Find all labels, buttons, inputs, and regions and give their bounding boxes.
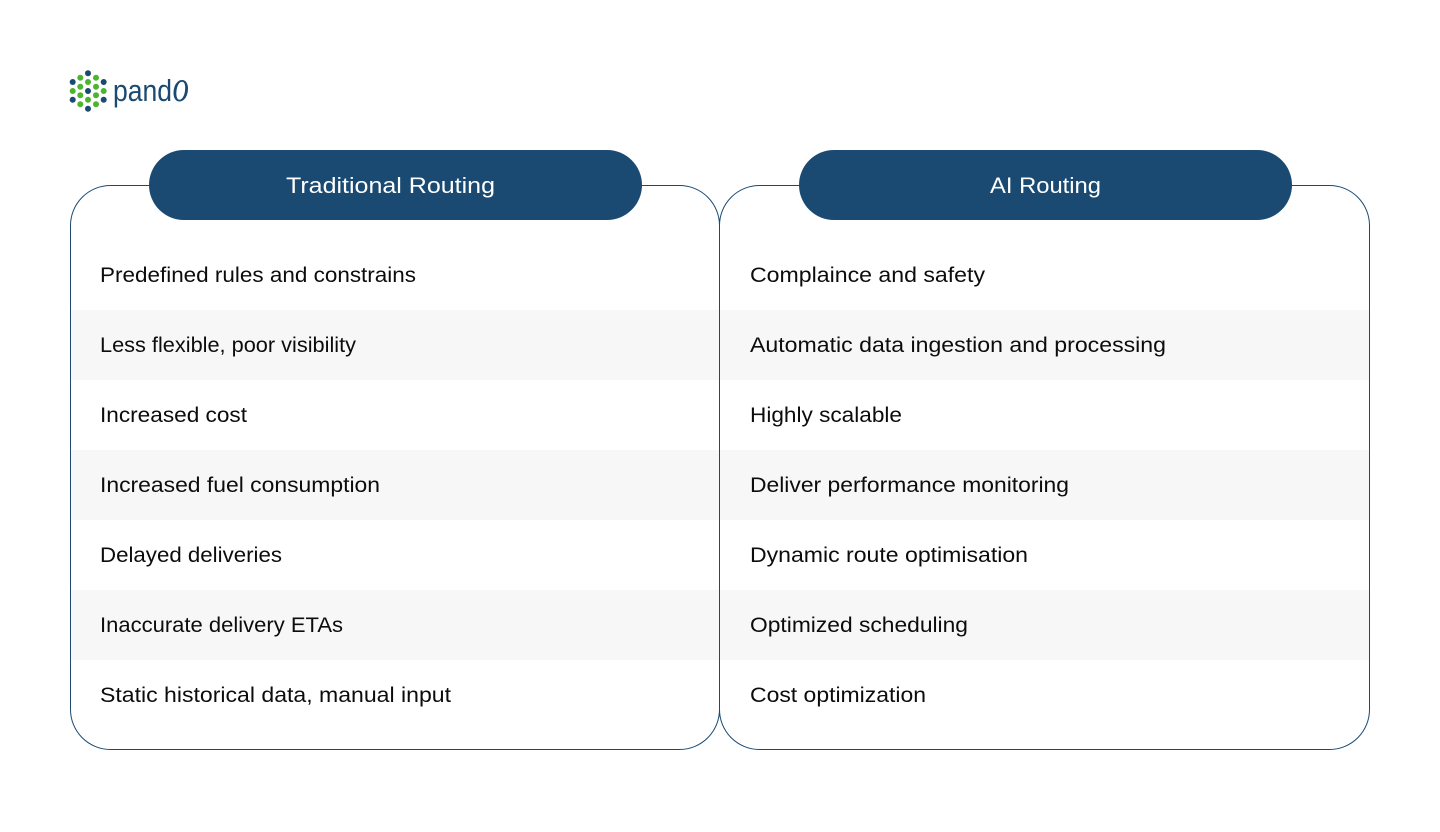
heading pill: traditional routing bbox=[149, 150, 642, 220]
logo wordmark: pand bbox=[113, 73, 172, 108]
list: ai routing items: Highly scalable bbox=[750, 404, 902, 427]
list: traditional routing items: Inaccurate delivery ETAs bbox=[100, 614, 343, 637]
list: ai routing items: Automatic data ingestion and processing bbox=[750, 334, 1166, 357]
row backgrounds bbox=[720, 310, 1369, 660]
icon: dot hexagon bbox=[70, 70, 107, 112]
panel outline bbox=[70, 186, 720, 750]
list: traditional routing items: Static historical data, manual input bbox=[100, 684, 451, 707]
list: ai routing items: Dynamic route optimisation bbox=[750, 544, 1028, 567]
list: ai routing items: Optimized scheduling bbox=[750, 614, 968, 637]
logo wordmark: o bbox=[172, 62, 189, 111]
list: traditional routing items: Increased cost bbox=[100, 404, 247, 427]
heading pill: ai routing: AI Routing bbox=[990, 173, 1101, 198]
list: traditional routing items bbox=[100, 264, 451, 707]
row backgrounds bbox=[71, 310, 719, 660]
list: traditional routing items: Less flexible, poor visibility bbox=[100, 334, 357, 357]
panel: traditional routing bbox=[70, 150, 720, 750]
list: traditional routing items: Predefined rules and constrains bbox=[100, 264, 416, 287]
list: traditional routing items: Increased fuel consumption bbox=[100, 474, 380, 497]
list: ai routing items: Cost optimization bbox=[750, 684, 926, 707]
list: ai routing items: Complaince and safety bbox=[750, 264, 986, 287]
logo: pando bbox=[70, 62, 189, 112]
panel outline bbox=[720, 186, 1370, 750]
list: ai routing items: Deliver performance monitoring bbox=[750, 474, 1069, 497]
panel: ai routing bbox=[720, 150, 1370, 750]
list: ai routing items bbox=[750, 264, 1166, 707]
heading pill: ai routing bbox=[799, 150, 1292, 220]
heading pill: traditional routing: Traditional Routing bbox=[286, 173, 495, 198]
list: traditional routing items: Delayed deliveries bbox=[100, 544, 282, 567]
